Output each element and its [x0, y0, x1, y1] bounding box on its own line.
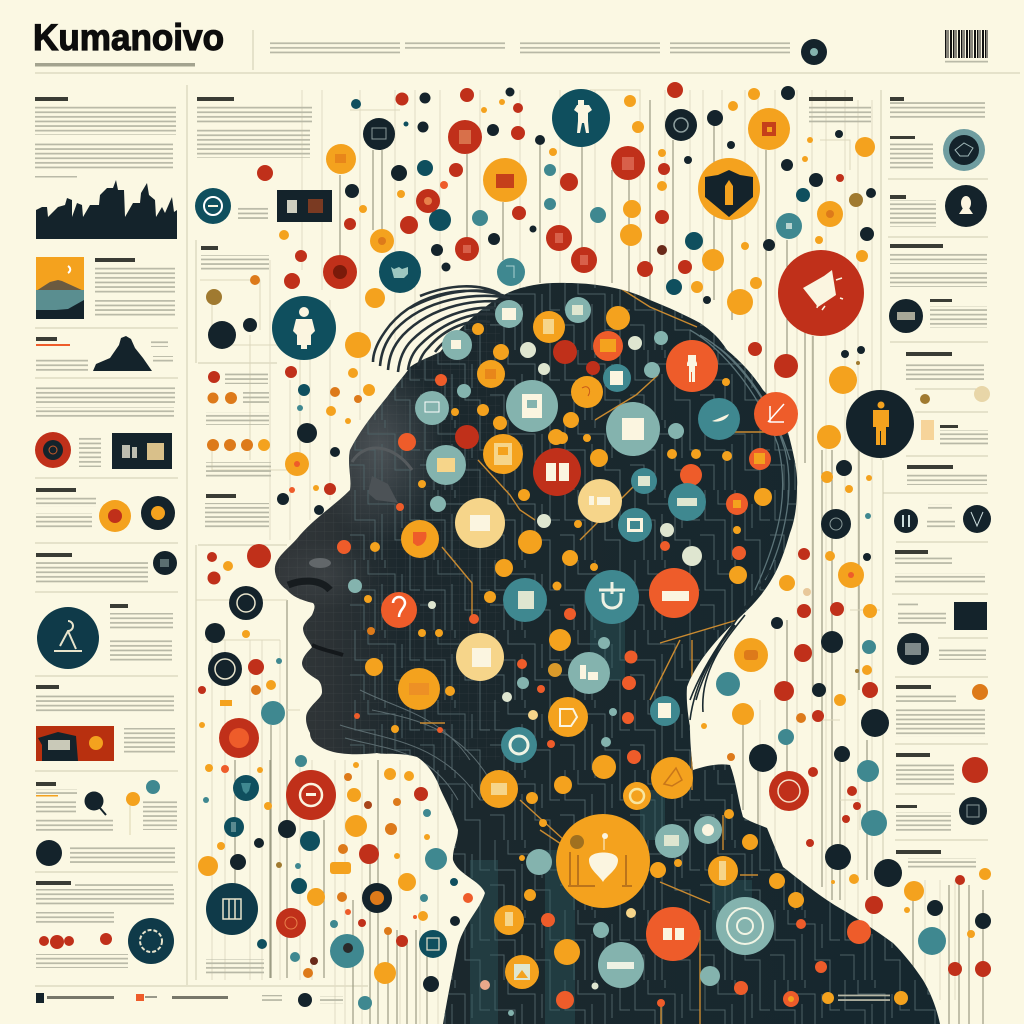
icon: [920, 386, 990, 404]
text block: [197, 97, 312, 158]
text: [79, 437, 101, 467]
icon: red square: [448, 120, 482, 154]
eye: [368, 476, 398, 503]
back hair: [690, 570, 770, 720]
text block: [898, 602, 946, 626]
dots: upper field: [206, 82, 876, 515]
landscape image: [36, 257, 84, 319]
text blocks: [206, 372, 271, 478]
icon: [897, 633, 929, 665]
text: [70, 847, 175, 864]
panel: right column: [809, 97, 991, 870]
dots: [39, 933, 112, 949]
icon: red: [323, 255, 357, 289]
text: [896, 805, 951, 832]
text block: [890, 195, 936, 227]
icon: red lower nodes: [370, 189, 597, 273]
icons: head nodes: [381, 297, 798, 989]
icons: lower-left nodes: [206, 586, 447, 968]
icon: orange small: [817, 201, 843, 227]
icon: compass circle: [37, 607, 99, 669]
text block: [896, 685, 985, 737]
text block: [110, 604, 173, 663]
text block: [809, 97, 871, 124]
label: [36, 337, 88, 372]
icon: orange: [483, 158, 527, 202]
text block: [36, 782, 113, 831]
text: [927, 504, 955, 528]
icon: [153, 551, 177, 575]
icon: red: [611, 146, 645, 180]
dots: inside head: [337, 306, 908, 1016]
icon: teal small: [776, 213, 802, 239]
dark card: [277, 190, 332, 222]
mountain: [93, 336, 152, 371]
text block: [95, 258, 175, 317]
right hair bands: [690, 330, 790, 590]
text: [205, 494, 269, 528]
text block: [890, 97, 985, 118]
dots: right field: [701, 460, 991, 977]
panel: second column: [195, 97, 332, 975]
text block: [896, 850, 976, 870]
icon: magnifier: [84, 792, 106, 815]
dark card: [112, 433, 172, 469]
icon: sun: [128, 918, 174, 964]
text block: [907, 465, 987, 485]
text: [124, 728, 175, 753]
text: [143, 800, 177, 830]
title: Kumanoivo: [33, 17, 224, 58]
hair strands: [373, 286, 510, 372]
icons: [959, 684, 988, 825]
icon: red target: [769, 771, 809, 811]
text: [238, 206, 268, 221]
head silhouette: [260, 270, 970, 1024]
barcode: [945, 44, 988, 65]
icon: header circle: [801, 39, 827, 65]
text: [940, 425, 988, 447]
teal bands: [470, 610, 752, 1024]
icon: teal figure left: [272, 296, 336, 360]
pins: [126, 780, 160, 835]
text block: [36, 488, 96, 529]
field lines: [212, 90, 955, 1024]
icon: dark figure: [846, 390, 914, 458]
icon: teal circle: [195, 188, 231, 224]
text block: [36, 881, 174, 924]
icon: figure in teal circle: [552, 89, 610, 147]
text block: [890, 136, 933, 169]
icon: teal node: [497, 258, 525, 286]
dark card: [954, 602, 987, 630]
icon: red disc: [35, 432, 71, 468]
skyline: [36, 180, 177, 239]
icon: orange: [326, 144, 356, 174]
icon: orange: [748, 108, 790, 150]
icons: [894, 505, 991, 533]
text: [939, 648, 986, 660]
mountain labels: [151, 341, 173, 363]
text: [36, 954, 128, 968]
dots: lower-left field: [198, 544, 473, 1010]
text: [895, 550, 985, 585]
icon: big red: [778, 250, 864, 336]
icon: dark ring: [665, 109, 697, 141]
icon: teal: [379, 251, 421, 293]
panel: left column: [35, 97, 343, 1007]
icon: [889, 299, 923, 333]
text block: [36, 553, 148, 583]
note: [921, 420, 934, 440]
text block: [36, 386, 175, 419]
text: [930, 299, 987, 328]
text: [206, 959, 264, 975]
text block: intro: [35, 97, 176, 180]
text block: [890, 244, 987, 287]
icon: [36, 840, 62, 866]
icons: discs: [99, 496, 175, 532]
text block: [36, 685, 174, 713]
shoulder text: [838, 992, 890, 1002]
image: red building: [36, 726, 114, 761]
icon: person: [945, 185, 987, 227]
icon: shield: [698, 158, 760, 220]
wires: [420, 288, 770, 1024]
icon: map circle: [943, 129, 985, 171]
header text: [270, 40, 790, 55]
subtitle: [35, 63, 195, 66]
text block: [201, 246, 269, 272]
footer: [36, 993, 343, 1007]
text block: [906, 352, 984, 382]
icon: squares: [363, 118, 395, 150]
text: [896, 753, 954, 787]
